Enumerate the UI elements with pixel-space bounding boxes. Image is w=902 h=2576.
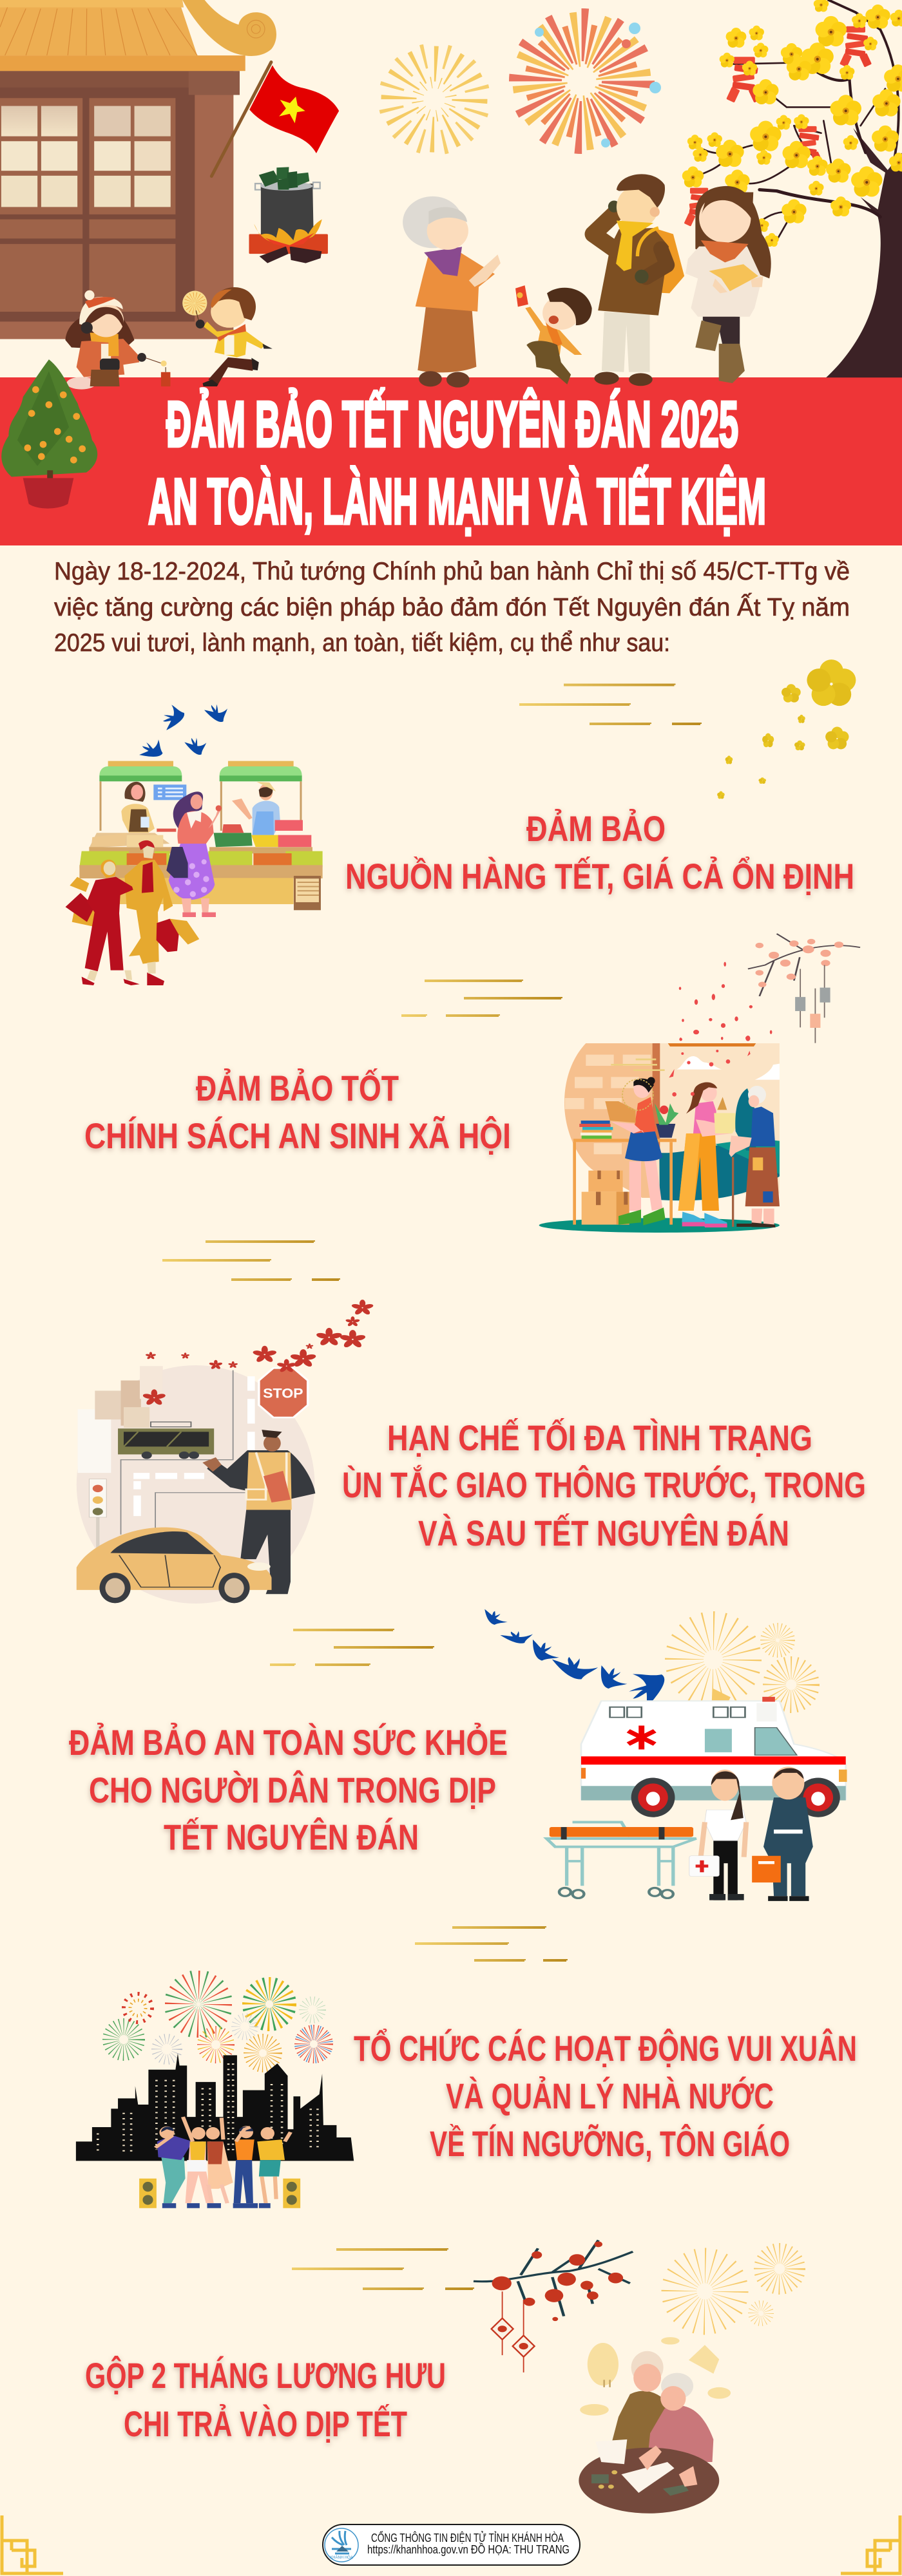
peach blossom branch [474, 2240, 633, 2372]
balloon and kite [580, 2337, 731, 2416]
illustration: traffic police [77, 1300, 374, 1604]
footer text [367, 2531, 570, 2556]
girl with firecracker [65, 290, 170, 390]
intro paragraph: 2025 vui tươi, lành mạnh, an toàn, tiết kiệm, cụ thể như sau: [54, 629, 670, 657]
firework gold [390, 55, 478, 143]
icon: swallows [137, 701, 231, 766]
gold lines group 2 [401, 981, 561, 1016]
heading: section 4: ĐẢM BẢO AN TOÀN SỨC KHỎE [69, 1722, 508, 1763]
family: mother [686, 186, 771, 383]
header illustration [0, 0, 902, 509]
blossom branch with lanterns and petals [679, 934, 860, 1043]
gold lines group 4 [270, 1630, 433, 1665]
heading: section 3: VÀ SAU TẾT NGUYÊN ĐÁN [418, 1513, 789, 1553]
skyline [76, 2053, 354, 2161]
stop sign: STOP [263, 1385, 303, 1401]
illustration: ambulance [477, 1607, 847, 1901]
family: father [593, 174, 684, 386]
heading: section 6: CHI TRẢ VÀO DỊP TẾT [124, 2403, 407, 2444]
title banner [0, 377, 902, 545]
illustration: peach branch and elderly couple [474, 2240, 731, 2514]
heading: section 5: VÀ QUẢN LÝ NHÀ NƯỚC [446, 2076, 774, 2116]
logo Khanh Hoa: KHÁNH HÒA [330, 2555, 353, 2560]
footer text: https://khanhhoa.gov.vn ĐỒ HỌA: THU TRANG [367, 2543, 570, 2556]
illustration: market stalls [66, 701, 323, 985]
falling yellow apricot flowers [717, 659, 856, 799]
gold lines group 6 [292, 2249, 473, 2289]
gold fireworks upper right [679, 2253, 795, 2321]
illustration: social welfare [539, 1030, 788, 1235]
taxi car [77, 1528, 271, 1603]
gold line group 5 top [415, 1927, 566, 1960]
gold lines group 3 [162, 1242, 339, 1280]
heading: section 1: ĐẢM BẢO [526, 808, 666, 849]
apricot blossom tree [682, 0, 902, 377]
intro paragraph: Ngày 18-12-2024, Thủ tướng Chính phủ ban hành Chỉ thị số 45/CT-TTg về [54, 558, 850, 585]
heading: section 2: CHÍNH SÁCH AN SINH XÃ HỘI [84, 1115, 511, 1156]
multicolor fireworks [111, 1985, 325, 2065]
swallows [477, 1607, 678, 1709]
heading: section 3: HẠN CHẾ TỐI ĐA TÌNH TRẠNG [387, 1417, 812, 1458]
grandmother [403, 196, 501, 388]
red blossoms [142, 1300, 374, 1406]
firework red orange [535, 23, 661, 147]
heading: section 2: ĐẢM BẢO TỐT [196, 1068, 399, 1108]
corner ornament right [841, 2515, 900, 2573]
flag of Vietnam [211, 62, 339, 176]
family: child with red envelope [515, 285, 592, 384]
heading: section 6: GỘP 2 THÁNG LƯƠNG HƯU [85, 2355, 446, 2396]
footer text: CỔNG THÔNG TIN ĐIỆN TỬ TỈNH KHÁNH HÒA [371, 2531, 564, 2544]
nurse [689, 1770, 746, 1900]
illustration: city skyline with people [76, 2053, 354, 2208]
traffic light [89, 1479, 106, 1549]
speakers [139, 2179, 300, 2208]
pot of banh chung over fire [249, 167, 328, 263]
dancing people [155, 2117, 291, 2208]
heading: section 1 [345, 808, 854, 896]
corner ornament left [2, 2515, 63, 2573]
market stalls [79, 761, 323, 910]
heading: section 3 [342, 1417, 866, 1553]
gold lines group 1 [519, 685, 700, 724]
woman in purple dress [166, 791, 222, 917]
man and woman shoppers [66, 840, 199, 985]
boy with sparkler [182, 287, 273, 386]
intro paragraph [54, 558, 850, 657]
footer credit pill [323, 2524, 580, 2565]
paramedic [752, 1766, 813, 1901]
heading: section 4 [69, 1722, 508, 1857]
elderly couple at table [579, 2351, 719, 2514]
stop sign [259, 1368, 308, 1417]
heading: section 6 [85, 2355, 446, 2444]
heading: section 4: CHO NGƯỜI DÂN TRONG DỊP [89, 1770, 496, 1810]
logo Khanh Hoa [325, 2528, 358, 2562]
heading: section 5 [354, 2028, 857, 2164]
gold fireworks near ambulance [684, 1631, 808, 1701]
intro paragraph: việc tăng cường các biện pháp bảo đảm đón Tết Nguyên đán Ất Tỵ năm [54, 593, 850, 621]
bus [118, 1422, 214, 1459]
house [0, 0, 276, 339]
heading: section 4: TẾT NGUYÊN ĐÁN [164, 1817, 419, 1857]
heading: section 2 [84, 1068, 511, 1156]
police officer [202, 1430, 315, 1594]
stretcher [546, 1822, 696, 1898]
kumquat tree [1, 359, 97, 509]
